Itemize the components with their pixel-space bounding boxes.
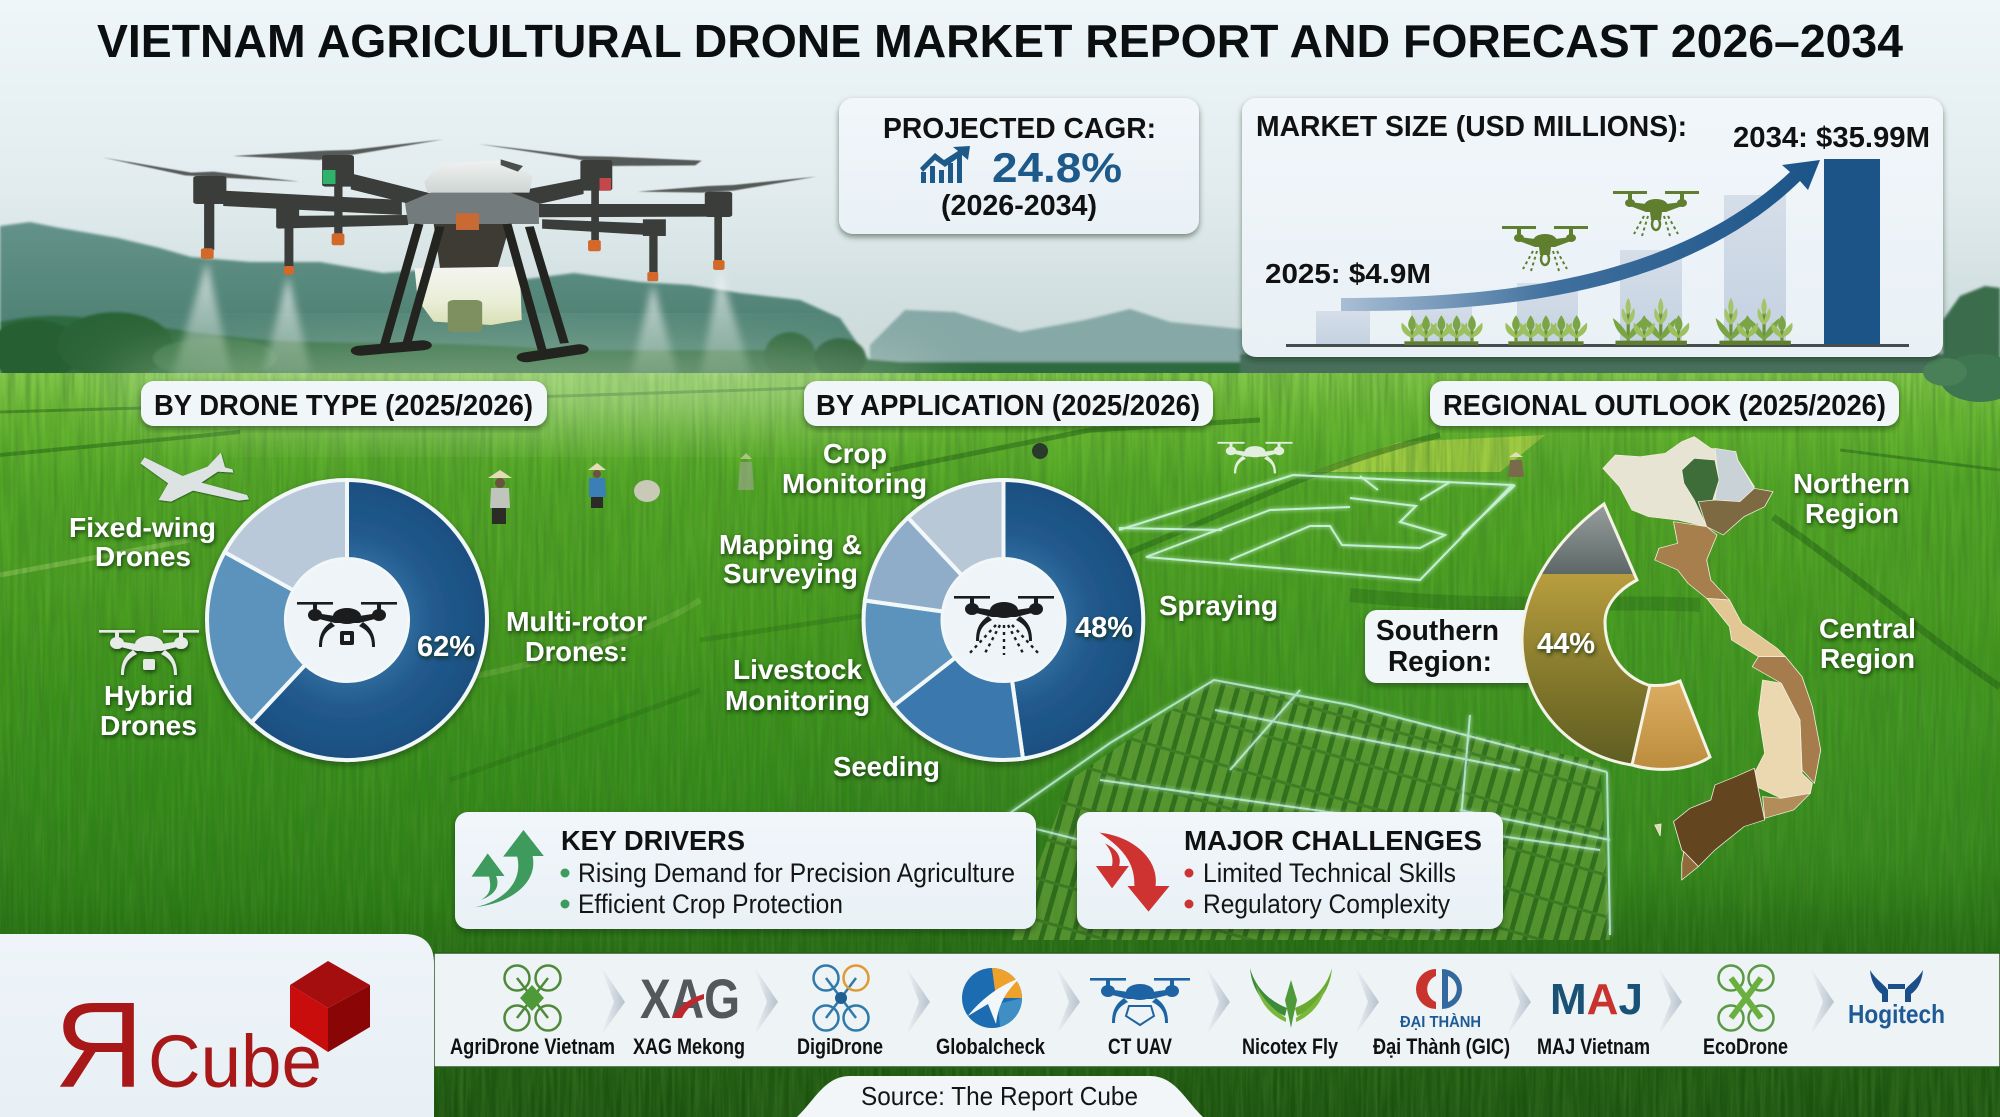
donut centre xyxy=(287,560,407,680)
wordmark: Я xyxy=(54,977,144,1113)
label: fixed-wing drones: Fixed-wing xyxy=(69,512,216,543)
label: fixed-wing drones xyxy=(69,512,216,572)
airframe arms xyxy=(193,155,732,273)
background: rice field xyxy=(0,340,2000,1117)
segment: mapping and surveying xyxy=(865,518,962,612)
logo: Nicotex Fly: Nicotex Fly xyxy=(1242,1034,1339,1059)
panel: key drivers: Efficient Crop Protection xyxy=(578,889,843,919)
label: fixed-wing drones: Drones xyxy=(95,541,191,572)
logo: Đại Thành xyxy=(1373,969,1510,1059)
icon: growth chart xyxy=(920,146,970,183)
background: people working in the field xyxy=(488,443,1524,524)
landing gear xyxy=(384,224,564,350)
region: northern xyxy=(1603,437,1773,535)
rotor blades xyxy=(102,139,816,193)
source tab: Source: The Report Cube xyxy=(861,1081,1138,1111)
label: livestock monitoring: Livestock xyxy=(733,654,862,685)
logo: MAJ Vietnam: M xyxy=(1550,975,1587,1024)
label: northern region: Region xyxy=(1805,498,1899,529)
background: small white survey drone xyxy=(1218,442,1292,473)
segment: hybrid drones xyxy=(207,552,305,722)
label: livestock monitoring: Monitoring xyxy=(725,685,870,716)
value: 48%: 48% xyxy=(1075,612,1133,644)
segment: crop monitoring xyxy=(908,480,1004,575)
panel: major challenges xyxy=(1077,812,1503,929)
segment: fixed-wing drones xyxy=(225,480,347,590)
logo: MAJ Vietnam: AJ xyxy=(1587,975,1643,1024)
panel: projected CAGR xyxy=(839,98,1199,234)
icon: hybrid drone xyxy=(99,630,199,675)
donut chart: drone type xyxy=(207,480,487,760)
label: multi-rotor drones: Multi-rotor xyxy=(506,606,647,637)
heading: regional outlook xyxy=(1430,381,1899,426)
panel: market size chart: 2025: $4.9M xyxy=(1265,258,1431,289)
panel: company strip xyxy=(434,953,2000,1067)
logo: Nicotex Fly xyxy=(1242,968,1339,1059)
donut centre xyxy=(944,560,1064,680)
label: livestock monitoring xyxy=(725,654,870,716)
logo: Globalcheck: Globalcheck xyxy=(936,1034,1046,1059)
logo: DigiDrone: DigiDrone xyxy=(797,1034,883,1059)
value: 44%: 44% xyxy=(1537,628,1595,660)
label: hybrid drones: Drones xyxy=(100,710,197,741)
icon: green up arrows xyxy=(472,830,544,907)
rice plants xyxy=(1401,298,1793,345)
label: central region xyxy=(1819,613,1916,674)
panel: major challenges: Limited Technical Skills xyxy=(1203,858,1456,888)
logo: XAG Mekong: XAG Mekong xyxy=(633,1034,745,1059)
logo: Globalcheck xyxy=(936,968,1046,1059)
heading: by drone type: BY DRONE TYPE (2025/2026) xyxy=(154,390,533,422)
heading: regional outlook: REGIONAL OUTLOOK (2025/2026) xyxy=(1443,390,1886,422)
logo: Hogitech xyxy=(1848,970,1945,1029)
panel: major challenges: MAJOR CHALLENGES xyxy=(1184,825,1482,856)
panel: market size chart xyxy=(1242,98,1943,357)
background: mountains and tree line xyxy=(0,222,2000,380)
icon: green spray drones xyxy=(1502,191,1699,271)
panel: logo xyxy=(0,934,434,1117)
map: Vietnam regions xyxy=(1603,437,1821,880)
label: mapping and surveying xyxy=(719,529,862,589)
logo: EcoDrone: EcoDrone xyxy=(1703,1034,1788,1059)
panel: projected CAGR: (2026-2034) xyxy=(941,190,1097,222)
panel: market size chart: 2034: $35.99M xyxy=(1733,122,1930,154)
flight electronics xyxy=(434,224,510,268)
icon: red cube xyxy=(290,961,370,1052)
heading: by application: BY APPLICATION (2025/2026) xyxy=(816,390,1200,422)
logo: EcoDrone xyxy=(1703,966,1788,1059)
title: VIETNAM AGRICULTURAL DRONE MARKET REPORT AND FORECAST 2026–2034 xyxy=(97,15,1903,67)
label: hybrid drones: Hybrid xyxy=(104,680,193,711)
panel: projected CAGR: PROJECTED CAGR: xyxy=(883,113,1156,145)
logo: AgriDrone Vietnam xyxy=(450,966,615,1059)
label: crop monitoring: Monitoring xyxy=(782,468,927,499)
logo: XAG Mekong xyxy=(633,967,745,1059)
panel: key drivers xyxy=(455,812,1036,929)
spray cones xyxy=(172,262,752,376)
label: crop monitoring: Crop xyxy=(823,438,887,469)
icon: fixed-wing plane xyxy=(140,453,249,502)
logo: MAJ Vietnam: MAJ Vietnam xyxy=(1537,1034,1650,1059)
label: northern region: Northern xyxy=(1793,468,1910,499)
tank xyxy=(415,267,522,325)
central hub and canopy xyxy=(405,190,539,224)
growth arrow xyxy=(1341,160,1820,311)
logo: CT UAV xyxy=(1090,978,1190,1059)
label: multi-rotor drones: Drones: xyxy=(525,636,628,667)
region: central xyxy=(1655,522,1821,798)
logo: Hogitech: Hogitech xyxy=(1848,999,1945,1029)
panel: major challenges: Regulatory Complexity xyxy=(1203,889,1450,919)
value: 62%: 62% xyxy=(417,631,475,663)
chevron separators xyxy=(600,965,1834,1037)
callout: southern region: Region: xyxy=(1388,646,1492,678)
label: hybrid drones xyxy=(100,680,197,741)
icon: spraying drone xyxy=(954,596,1054,655)
status lights xyxy=(323,170,335,184)
label: central region: Central xyxy=(1819,613,1916,644)
label: multi-rotor drones xyxy=(506,606,647,667)
background: smart-farm crop grid, lower xyxy=(1000,680,1610,940)
callout: southern region xyxy=(1365,610,1540,683)
nozzles xyxy=(201,233,725,281)
logo: DigiDrone xyxy=(797,966,883,1059)
background: sky xyxy=(0,0,2000,376)
background: holographic field map, upper xyxy=(1119,475,1515,580)
segment: seeding xyxy=(893,658,1023,760)
region: southern xyxy=(1655,768,1810,880)
donut chart: application xyxy=(864,480,1143,760)
callout: southern region: Southern xyxy=(1376,615,1499,647)
segment: livestock monitoring xyxy=(864,600,955,706)
bars xyxy=(1316,195,1786,346)
icon: red down arrows xyxy=(1096,833,1170,912)
label: crop monitoring xyxy=(782,438,927,499)
segment: spraying 48% xyxy=(1004,480,1143,759)
panel: logo: Cube xyxy=(148,1020,322,1103)
logo: AgriDrone Vietnam: AgriDrone Vietnam xyxy=(450,1034,615,1059)
logo: XAG Mekong: XAG xyxy=(640,967,740,1030)
label: mapping and surveying: Surveying xyxy=(723,558,858,589)
label: central region: Region xyxy=(1820,643,1915,674)
panel: key drivers: KEY DRIVERS xyxy=(561,825,745,856)
logo: Đại Thành: Đại Thành (GIC) xyxy=(1373,1034,1510,1059)
icon: camera drone xyxy=(297,602,397,647)
label: spraying: Spraying xyxy=(1159,590,1278,621)
logo: CT UAV: CT UAV xyxy=(1108,1034,1172,1059)
label: seeding: Seeding xyxy=(833,751,940,782)
heading: by drone type xyxy=(141,381,547,426)
panel: key drivers: Rising Demand for Precision Agriculture xyxy=(578,858,1015,888)
panel: market size chart: MARKET SIZE (USD MILLIONS): xyxy=(1256,111,1687,143)
panel: projected CAGR: 24.8% xyxy=(992,144,1122,191)
wedge chart: southern region 44% xyxy=(1515,500,1720,775)
label: mapping and surveying: Mapping & xyxy=(719,529,862,560)
logo: MAJ Vietnam xyxy=(1537,975,1650,1059)
logo: Đại Thành: ĐẠI THÀNH xyxy=(1400,1012,1481,1031)
segment: multi-rotor drones 62% xyxy=(252,480,487,760)
source tab xyxy=(797,1076,1203,1117)
label: northern region xyxy=(1793,468,1910,529)
agricultural spraying drone xyxy=(102,139,816,357)
heading: by application xyxy=(804,381,1213,426)
